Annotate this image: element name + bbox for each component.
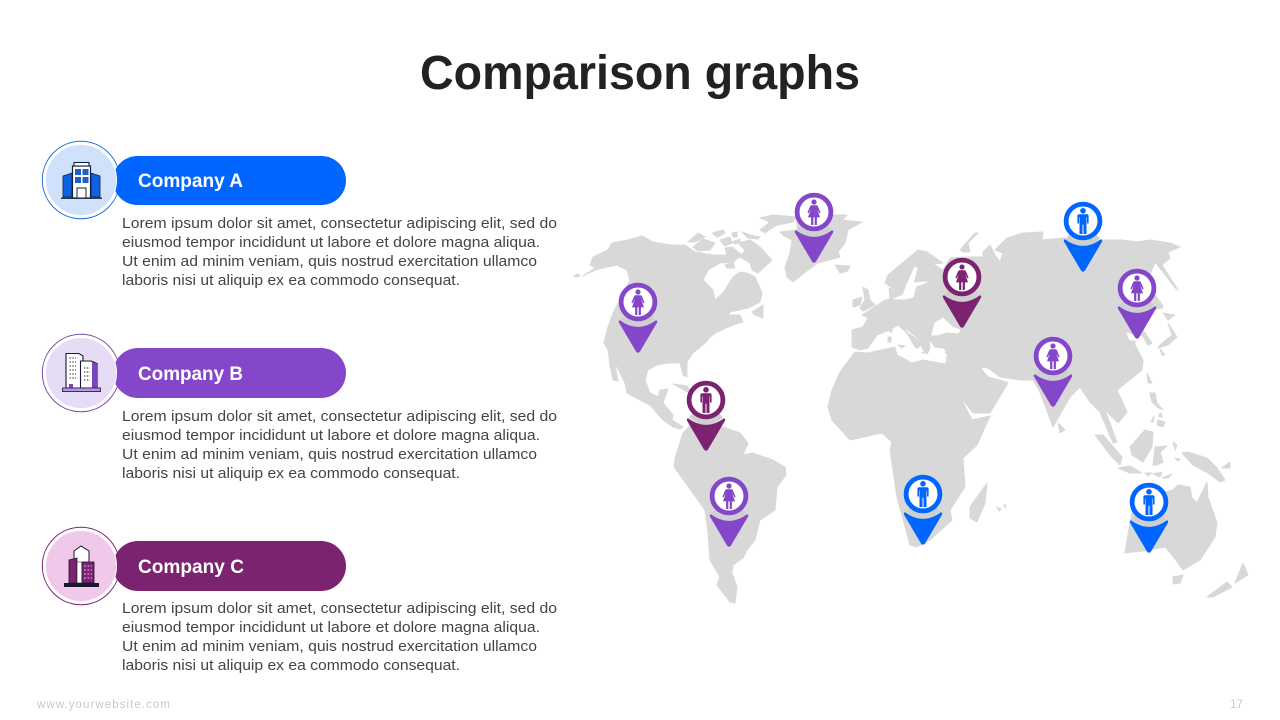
pin: blue man, Russia bbox=[1064, 204, 1102, 272]
description text: Ut enim ad minim veniam, quis nostrud exercitation ullamco bbox=[122, 446, 537, 463]
description text: laboris nisi ut aliquip ex ea commodo consequat. bbox=[122, 465, 460, 482]
description text: laboris nisi ut aliquip ex ea commodo consequat. bbox=[122, 657, 460, 674]
title: Comparison graphs bbox=[420, 47, 860, 100]
description text bbox=[122, 215, 557, 289]
description text bbox=[122, 408, 557, 482]
description text: Lorem ipsum dolor sit amet, consectetur adipiscing elit, sed do bbox=[122, 600, 557, 617]
pin: blue man, southern Africa bbox=[904, 477, 942, 545]
company label: Company A bbox=[138, 170, 243, 192]
pin: blue man, Australia bbox=[1130, 485, 1168, 553]
company label: Company C bbox=[138, 556, 244, 578]
panel: Company A bbox=[42, 141, 557, 289]
page number: 17 bbox=[1230, 697, 1243, 711]
panel: Company C bbox=[42, 527, 557, 674]
description text: Lorem ipsum dolor sit amet, consectetur adipiscing elit, sed do bbox=[122, 408, 557, 425]
description text: eiusmod tempor incididunt ut labore et dolore magna aliqua. bbox=[122, 427, 540, 444]
icon: office building with blue wings bbox=[42, 141, 346, 219]
pin: purple woman, East Asia bbox=[1118, 271, 1156, 339]
icon: dark plum skyscrapers bbox=[42, 527, 346, 605]
description text: eiusmod tempor incididunt ut labore et dolore magna aliqua. bbox=[122, 619, 540, 636]
pin: purple woman, India bbox=[1034, 339, 1072, 407]
description text: eiusmod tempor incididunt ut labore et dolore magna aliqua. bbox=[122, 234, 540, 251]
world map bbox=[574, 215, 1248, 603]
pin: purple woman, North America bbox=[619, 285, 657, 353]
pin: purple woman, Greenland bbox=[795, 195, 833, 263]
pin: purple woman, South America bbox=[710, 479, 748, 547]
panel: Company B bbox=[42, 334, 557, 482]
icon: white towers with purple accents bbox=[42, 334, 346, 412]
footer website: www.yourwebsite.com bbox=[36, 699, 170, 711]
pin: plum woman, Eastern Europe bbox=[943, 260, 981, 328]
description text: Lorem ipsum dolor sit amet, consectetur adipiscing elit, sed do bbox=[122, 215, 557, 232]
pin: plum man, Central America bbox=[687, 383, 725, 451]
description text: laboris nisi ut aliquip ex ea commodo consequat. bbox=[122, 272, 460, 289]
description text: Ut enim ad minim veniam, quis nostrud exercitation ullamco bbox=[122, 638, 537, 655]
company label: Company B bbox=[138, 363, 243, 385]
description text bbox=[122, 600, 557, 674]
description text: Ut enim ad minim veniam, quis nostrud exercitation ullamco bbox=[122, 253, 537, 270]
